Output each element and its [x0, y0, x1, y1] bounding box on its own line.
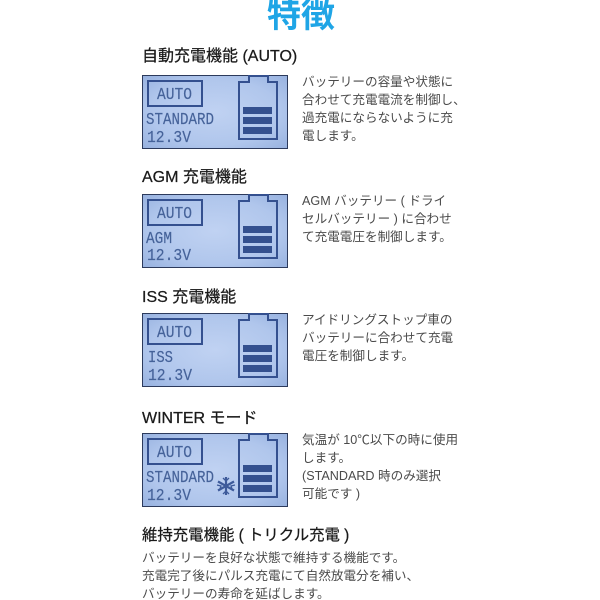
panel: ISS LCD: AUTO: [157, 323, 192, 342]
text: AGM description: [302, 194, 452, 244]
text: ISS description: アイドリングストップ車の: [302, 313, 452, 327]
text: auto description: 過充電にならないように充: [302, 111, 453, 125]
text: AGM description: セルバッテリー ) に合わせ: [302, 212, 452, 226]
text: winter description: 気温が 10℃以下の時に使用: [302, 433, 458, 447]
text: AGM description: AGM バッテリー ( ドライ: [302, 194, 446, 208]
panel: auto LCD: AUTO: [157, 85, 192, 104]
text: auto description: 電します。: [302, 129, 364, 143]
panel: AGM LCD: AUTO: [157, 204, 192, 223]
panel: winter LCD: AUTO: [157, 443, 192, 462]
panel: AGM LCD: AGM: [146, 229, 172, 248]
icon: snowflake: [217, 477, 235, 495]
text: trickle description: [142, 551, 419, 600]
panel: auto LCD: 12.3V: [147, 128, 191, 147]
heading: ISS charge: ISS 充電機能: [142, 289, 236, 306]
text: winter description: [302, 433, 458, 501]
text: ISS description: 電圧を制御します。: [302, 349, 414, 363]
text: winter description: します。: [302, 451, 351, 465]
heading: auto charge: 自動充電機能 (AUTO): [142, 48, 297, 65]
text: winter description: 可能です ): [302, 487, 360, 501]
panel: winter LCD: 12.3V: [147, 486, 191, 505]
text: auto description: バッテリーの容量や状態に: [302, 75, 453, 89]
text: winter description: (STANDARD 時のみ選択: [302, 469, 441, 483]
text: ISS description: バッテリーに合わせて充電: [302, 331, 453, 345]
text: trickle description: 充電完了後にパルス充電にて自然放電分を補い、: [142, 569, 419, 583]
panel: winter LCD: STANDARD: [146, 468, 214, 487]
heading: trickle charge: 維持充電機能 ( トリクル充電 ): [142, 527, 349, 544]
panel: ISS LCD: 12.3V: [148, 366, 192, 385]
panel: AGM LCD: [142, 194, 288, 268]
text: ISS description: [302, 313, 453, 363]
panel: ISS LCD: ISS: [148, 348, 173, 367]
text: trickle description: バッテリーを良好な状態で維持する機能です。: [142, 551, 405, 565]
heading: winter mode: WINTER モード: [142, 410, 258, 427]
panel: winter LCD: [142, 433, 288, 507]
text: auto description: [302, 75, 466, 143]
panel: auto LCD: STANDARD: [146, 110, 214, 129]
text: AGM description: て充電電圧を制御します。: [302, 230, 452, 244]
panel: AGM LCD: 12.3V: [147, 246, 191, 265]
panel: auto LCD: [142, 75, 288, 149]
text: auto description: 合わせて充電電流を制御し、: [302, 93, 466, 107]
panel: ISS LCD: [142, 313, 288, 387]
heading: AGM charge: AGM 充電機能: [142, 169, 247, 186]
